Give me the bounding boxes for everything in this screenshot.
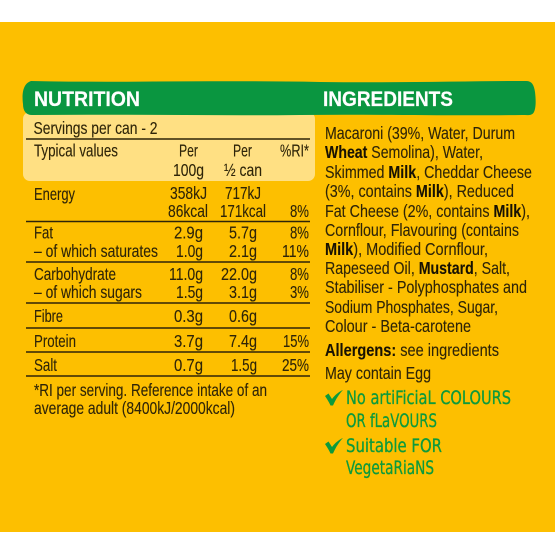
heading: nutrition: NUTRITION: [34, 87, 140, 111]
row: carbohydrate: [34, 264, 309, 302]
row: energy: 86kcal: [168, 201, 208, 221]
table header: %RI*: [280, 140, 309, 160]
row: protein: Protein: [34, 331, 76, 351]
ingredients text: Macaroni (39%, Water, Durum: [325, 123, 515, 143]
row: carbohydrate: 1.5g: [176, 282, 203, 302]
footnote: average adult (8400kJ/2000kcal): [34, 398, 235, 418]
row: fat: 11%: [282, 241, 309, 261]
row: energy: 8%: [290, 201, 309, 221]
heading: ingredients: INGREDIENTS: [323, 87, 453, 111]
footnote: *RI per serving. Reference intake of an: [34, 380, 267, 400]
row: fat: Fat: [34, 222, 53, 242]
ingredients text: Colour - Beta-carotene: [325, 316, 471, 336]
footnote: [34, 380, 267, 418]
row: carbohydrate: 3%: [290, 282, 309, 302]
claim: no artificial colours: OR fLaVOURS: [346, 410, 437, 432]
row: fat: [34, 222, 309, 261]
claim: no artificial colours: [346, 387, 511, 432]
claim: suitable for vegetarians: [346, 435, 442, 479]
ingredients text: Rapeseed Oil, Mustard, Salt,: [325, 258, 510, 278]
table header: Per: [233, 140, 252, 160]
icon: check mark 2: [325, 438, 343, 454]
allergens: Allergens: see ingredients: [325, 340, 499, 360]
row: protein: [34, 331, 309, 351]
ingredients text: (3%, contains Milk), Reduced: [325, 181, 514, 201]
row: carbohydrate: 22.0g: [221, 264, 257, 284]
green heading band: [23, 81, 536, 115]
row: fat: 2.1g: [229, 241, 257, 261]
ingredients text: [325, 123, 532, 336]
ingredients text: Wheat Semolina), Water,: [325, 142, 483, 162]
claim: no artificial colours: No artiFiciaL COLOURS: [346, 387, 511, 409]
row: energy: 717kJ: [225, 183, 261, 203]
row: fat: – of which saturates: [34, 241, 158, 261]
icon: check mark 1: [325, 390, 343, 406]
row: energy: Energy: [34, 184, 75, 204]
ingredients text: Milk), Modified Cornflour,: [325, 239, 488, 259]
row: fat: 1.0g: [176, 241, 203, 261]
row: energy: [34, 183, 309, 221]
row: servings: Servings per can - 2: [34, 118, 158, 138]
claim: suitable for vegetarians: Suitable FOR: [346, 435, 442, 457]
row: fat: 2.9g: [174, 222, 203, 242]
row: fibre: Fibre: [34, 306, 63, 326]
row: carbohydrate: 3.1g: [229, 282, 257, 302]
table header: 100g: [173, 160, 204, 180]
row: salt: Salt: [34, 355, 57, 375]
ingredients text: Sodium Phosphates, Sugar,: [325, 297, 498, 317]
row: salt: [34, 355, 309, 375]
row: carbohydrate: – of which sugars: [34, 282, 142, 302]
row: energy: 171kcal: [220, 201, 266, 221]
row: fibre: 0.3g: [174, 306, 203, 326]
may contain: May contain Egg: [325, 363, 431, 383]
row: carbohydrate: Carbohydrate: [34, 264, 116, 284]
table header: Typical values: [34, 140, 118, 160]
table header: [34, 140, 309, 180]
row: fibre: 0.6g: [229, 306, 257, 326]
row: protein: 15%: [283, 331, 309, 351]
row: protein: 3.7g: [174, 331, 203, 351]
row: energy: 358kJ: [170, 183, 207, 203]
row: protein: 7.4g: [229, 331, 257, 351]
claim: suitable for vegetarians: VegetaRiaNS: [346, 457, 434, 479]
row: salt: 1.5g: [231, 355, 257, 375]
pale header panel: [23, 112, 315, 181]
row: carbohydrate: 11.0g: [169, 264, 203, 284]
row: fat: 8%: [290, 222, 309, 242]
table header: Per: [179, 140, 198, 160]
row: salt: 0.7g: [174, 355, 203, 375]
table header: ½ can: [224, 160, 262, 180]
row: fat: 5.7g: [229, 222, 257, 242]
nutrition table: [26, 118, 310, 418]
row: salt: 25%: [282, 355, 309, 375]
ingredients text: Skimmed Milk, Cheddar Cheese: [325, 162, 532, 182]
ingredients text: Fat Cheese (2%, contains Milk),: [325, 201, 530, 221]
row: fibre: [34, 306, 257, 326]
row: carbohydrate: 8%: [290, 264, 309, 284]
